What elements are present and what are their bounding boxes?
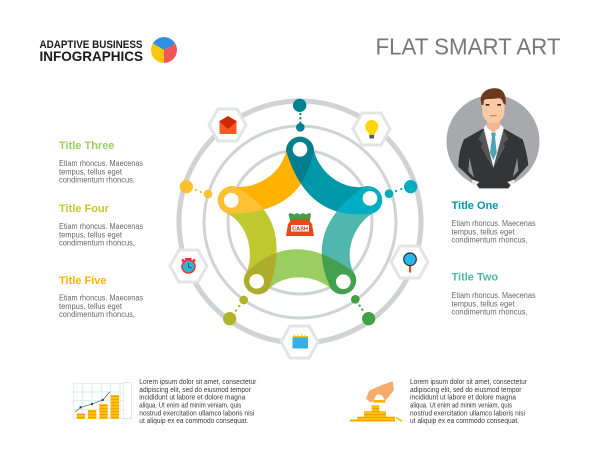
- icon: hand placing coin: [350, 381, 403, 422]
- text block: Title Three: Etiam rhoncus. Maecenas: [59, 159, 143, 168]
- band: olive: [183, 181, 307, 300]
- logo: [40, 37, 177, 64]
- icon: envelope: [220, 116, 236, 134]
- logo pie icon: [151, 37, 177, 63]
- text block: left lorem ipsum: [139, 377, 257, 425]
- coin pile: [350, 405, 395, 422]
- band: sea green: [303, 183, 407, 298]
- coin: [373, 400, 385, 403]
- neck and face: [487, 118, 500, 133]
- text block: Title Three: [59, 140, 143, 184]
- logo text: [40, 39, 143, 64]
- tie: [490, 133, 497, 160]
- connector: right: [385, 180, 417, 198]
- text block: Title Five: tempus, tellus eget: [59, 302, 123, 311]
- overlap: right: [337, 186, 382, 214]
- shirt: [484, 127, 503, 167]
- arm gaps: [468, 157, 518, 177]
- text block: Title Two: Title Two: [452, 272, 498, 284]
- icon: cash bag: [286, 213, 314, 236]
- businessman figure: [458, 88, 528, 188]
- overlap: top: [286, 136, 314, 184]
- text block: Title One: [452, 200, 536, 244]
- suit: [458, 128, 528, 188]
- text block: Title Four: Title Four: [59, 203, 110, 215]
- text block: Title Two: tempus, tellus eget: [452, 299, 515, 308]
- connector dots: [180, 99, 417, 325]
- text block: Title One: tempus, tellus eget: [452, 227, 515, 236]
- overlap: left: [218, 186, 264, 214]
- logo text: ADAPTIVE BUSINESS: [40, 39, 142, 51]
- five-point star bands: [218, 136, 382, 294]
- text block: left lorem ipsum: ut aliquip ex ea commodo consequat.: [139, 416, 248, 425]
- band: orange: [214, 118, 318, 233]
- text block: left lorem ipsum: Lorem ipsum dolor sit amet, consectetur: [139, 377, 257, 386]
- text block: Title Two: condimentum rhoncus,: [452, 308, 528, 316]
- title: FLAT SMART ART: [376, 33, 560, 59]
- text block: right lorem ipsum: [410, 377, 527, 425]
- hexagon badges: [170, 109, 428, 358]
- text block: Title Five: [59, 275, 143, 319]
- hand: [366, 381, 394, 403]
- lapels: [478, 129, 508, 168]
- dashed column: [123, 383, 132, 419]
- text block: right lorem ipsum: Lorem ipsum dolor sit amet, consectetur: [410, 377, 527, 386]
- pin holes: [224, 142, 377, 289]
- text block: Title Five: Title Five: [59, 275, 106, 287]
- connector: left: [180, 180, 212, 198]
- text block: Title Two: [452, 272, 536, 316]
- text block: right lorem ipsum: nostrud exercitation ullamco laboris nisi: [410, 408, 525, 417]
- text block: Title One: condimentum rhoncus,: [452, 236, 528, 244]
- overlap: bottom right: [322, 254, 356, 294]
- connector: bottom right: [351, 295, 375, 325]
- radial diagram: [170, 99, 428, 358]
- text block: Title Four: [59, 203, 143, 248]
- chart grid: [73, 383, 132, 419]
- text block: Title Two: Etiam rhoncus. Maecenas: [452, 291, 536, 300]
- text block: Title One: Title One: [452, 200, 498, 212]
- icon: magnifier: [404, 253, 416, 272]
- text block: Title Four: condimentum rhoncus,: [59, 238, 135, 248]
- band: teal: [286, 137, 382, 214]
- band: light green: [238, 221, 362, 340]
- overlap: bottom left: [244, 253, 276, 294]
- icon: cash bag: CASH: [292, 226, 308, 232]
- logo text: INFOGRAPHICS: [40, 48, 143, 64]
- text block: right lorem ipsum: adipiscing elit, sed do eiusmod tempor: [410, 385, 522, 394]
- portrait background: [446, 95, 540, 188]
- text block: Title Five: condimentum rhoncus,: [59, 310, 135, 319]
- gold bars: [77, 395, 119, 419]
- hands: [472, 179, 515, 185]
- icon: calendar: [292, 334, 308, 348]
- text block: left lorem ipsum: nostrud exercitation ullamco laboris nisi: [139, 408, 255, 417]
- text block: Title Three: condimentum rhoncus,: [59, 176, 135, 184]
- text block: right lorem ipsum: aliqua. Ut enim ad minim veniam, quis: [410, 400, 512, 409]
- text block: Title Three: Title Three: [59, 140, 114, 152]
- icon: alarm clock: [182, 258, 196, 273]
- text block: Title Five: Etiam rhoncus. Maecenas: [59, 294, 143, 302]
- text block: Title Four: Etiam rhoncus. Maecenas: [59, 222, 143, 231]
- person portrait: [446, 88, 540, 188]
- trend line: [75, 392, 110, 412]
- text block: right lorem ipsum: ut aliquip ex ea commodo consequat.: [410, 416, 519, 425]
- text block: left lorem ipsum: adipiscing elit, sed do eiusmod tempor: [139, 385, 251, 394]
- text block: left lorem ipsum: aliqua. Ut enim ad minim veniam, quis: [139, 400, 241, 409]
- text block: Title One: Etiam rhoncus. Maecenas: [452, 219, 536, 228]
- connector: top: [293, 99, 306, 132]
- icon: growth bar chart: [73, 383, 132, 419]
- text block: Title Three: tempus, tellus eget: [59, 167, 123, 176]
- icon: light bulb: [365, 120, 378, 138]
- text block: right lorem ipsum: incididunt ut labore et dolore magna: [410, 393, 517, 402]
- connector: bottom left: [223, 296, 248, 325]
- text block: left lorem ipsum: incididunt ut labore et dolore magna: [139, 393, 246, 402]
- concentric rings: [179, 101, 421, 343]
- text block: Title Four: tempus, tellus eget: [59, 230, 123, 239]
